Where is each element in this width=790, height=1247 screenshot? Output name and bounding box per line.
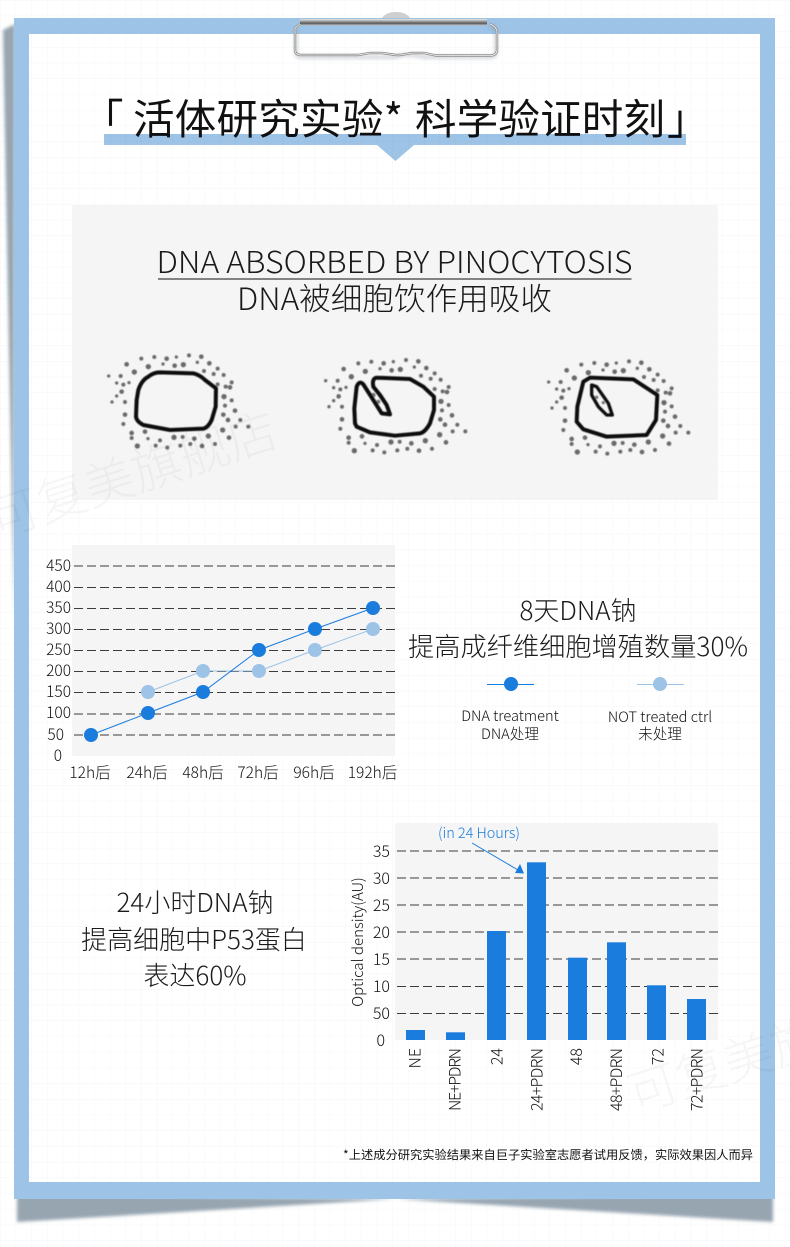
- x axis labels: 48h后: [182, 761, 224, 783]
- panel heading: DNA ABSORBED BY PINOCYTOSIS: [156, 238, 632, 282]
- x axis labels: 192h后: [348, 761, 397, 783]
- text block: 24 hour result: 24小时DNA钠: [117, 883, 273, 920]
- text block: 24 hour result: 提高细胞中P53蛋白: [81, 920, 307, 957]
- x axis labels: 72h后: [237, 761, 279, 783]
- y axis labels: 25: [373, 892, 390, 916]
- icon: metal clip: [295, 12, 497, 57]
- legend: DNA treatment: DNA treatment: [461, 705, 559, 726]
- x axis labels: [69, 761, 397, 783]
- legend: DNA treatment: DNA处理: [481, 723, 539, 744]
- title: 活体研究实验*: [133, 86, 403, 146]
- y axis labels: 30: [373, 865, 390, 889]
- bars: [406, 862, 706, 1040]
- x axis labels: NE: [402, 1048, 426, 1068]
- panel: pinocytosis: [72, 205, 718, 500]
- x axis labels: 96h后: [293, 761, 335, 783]
- y axis labels: 50: [47, 723, 64, 745]
- diagram: cell step 1: [107, 353, 250, 450]
- x axis labels: 24h后: [126, 761, 168, 783]
- x axis labels: 48: [563, 1048, 587, 1065]
- annotation: in 24 hours: (in 24 Hours): [438, 822, 520, 843]
- panel heading: [156, 238, 632, 319]
- y axis labels: 10: [373, 973, 390, 997]
- y axis labels: 35: [373, 838, 390, 862]
- text block: 24 hour result: 表达60%: [143, 956, 247, 993]
- text block: 8 day result: 8天DNA钠: [519, 591, 637, 628]
- title underline bar with pointer: [104, 134, 686, 161]
- y axis labels: 20: [373, 919, 390, 943]
- x axis labels: NE+PDRN: [442, 1048, 466, 1111]
- y axis labels: 0: [54, 744, 62, 766]
- y axis labels: 250: [46, 638, 71, 660]
- y axis labels: 300: [46, 617, 71, 639]
- footnote: *上述成分研究实验结果来自巨子实验室志愿者试用反馈，实际效果因人而异: [343, 1146, 753, 1163]
- panel heading: DNA被细胞饮作用吸收: [237, 274, 552, 319]
- series: DNA treatment: [84, 601, 380, 742]
- y axis labels: 350: [46, 596, 71, 618]
- y axis labels: 100: [46, 701, 71, 723]
- title: [82, 86, 709, 146]
- y axis labels: 0: [376, 1027, 385, 1051]
- text block: 8 day result: 提高成纤维细胞增殖数量30%: [408, 627, 748, 664]
- y axis labels: [46, 554, 71, 766]
- x axis labels: 24+PDRN: [524, 1048, 548, 1111]
- x axis labels: 72+PDRN: [684, 1048, 708, 1111]
- diagram: cell step 3: [547, 359, 690, 456]
- series: not treated control: [141, 622, 380, 699]
- y axis labels: [373, 838, 390, 1051]
- line chart: fibroblast proliferation: [46, 545, 397, 783]
- x axis labels: 48+PDRN: [603, 1048, 627, 1111]
- legend: DNA treatment: [461, 677, 559, 744]
- y axis labels: 15: [373, 946, 390, 970]
- y axis labels: 400: [46, 575, 71, 597]
- text block: 24 hour result: [81, 883, 307, 993]
- x axis labels: 72: [644, 1048, 668, 1065]
- title: 科学验证时刻: [415, 86, 665, 146]
- x axis labels: 12h后: [69, 761, 111, 783]
- y axis labels: 450: [46, 554, 71, 576]
- x axis labels: [402, 1048, 708, 1111]
- x axis labels: 24: [484, 1048, 508, 1065]
- diagram: cell step 2: [324, 358, 467, 454]
- y axis labels: 50: [373, 1000, 390, 1024]
- text block: 8 day result: [408, 591, 748, 664]
- legend: not treated: 未处理: [638, 723, 682, 744]
- title: 「: [82, 86, 124, 146]
- y axis title: Optical density(AU): [347, 877, 368, 1007]
- y axis labels: 150: [46, 680, 71, 702]
- bar chart: P53 expression: [347, 822, 718, 1111]
- legend: not treated: [608, 677, 712, 744]
- title: 」: [667, 86, 709, 146]
- y axis labels: 200: [46, 659, 71, 681]
- arrow: annotation pointer: [472, 843, 524, 874]
- legend: not treated: NOT treated ctrl: [608, 706, 712, 727]
